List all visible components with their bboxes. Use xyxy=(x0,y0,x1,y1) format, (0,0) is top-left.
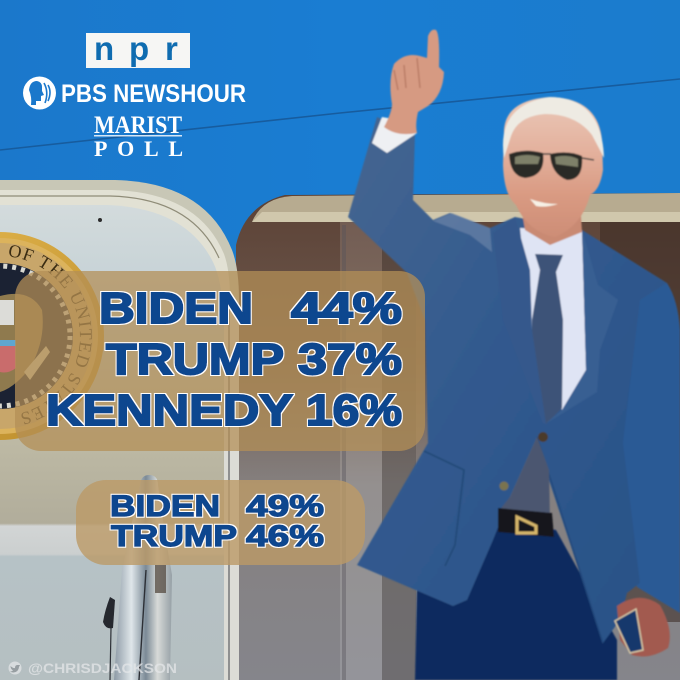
right sleeve xyxy=(620,283,680,613)
jacket front shadow line xyxy=(537,437,603,643)
two-way poll results xyxy=(110,490,324,553)
presidential seal: OF THE UNITED STATES xyxy=(9,245,92,424)
Twitter handle watermark: @CHRISDJACKSON xyxy=(28,661,177,676)
boarding stair rail xyxy=(103,475,172,680)
aircraft door xyxy=(0,180,239,680)
lower tie and belt xyxy=(498,437,550,520)
PBS NewsHour logo xyxy=(23,76,246,110)
raised hand xyxy=(384,30,444,134)
three-way poll results: BIDEN xyxy=(99,284,253,333)
right lapel xyxy=(545,230,618,424)
three-way poll results: TRUMP xyxy=(106,335,284,384)
two-way poll panel xyxy=(76,480,365,565)
jacket buttons xyxy=(500,432,548,490)
two-way poll results: TRUMP xyxy=(111,520,237,553)
two-way poll results: 49% xyxy=(246,490,324,523)
two-way poll results: BIDEN xyxy=(110,490,220,523)
three-way poll results: 37% xyxy=(298,335,402,384)
lower hand and phone xyxy=(615,598,670,656)
blue fuselage background xyxy=(0,0,680,235)
trousers xyxy=(415,520,617,680)
suit jacket xyxy=(348,117,667,643)
hair xyxy=(503,97,604,158)
Marist Poll logo: MARIST xyxy=(94,112,182,139)
aviator sunglasses xyxy=(509,151,594,180)
Marist Poll logo xyxy=(94,112,183,161)
necktie xyxy=(532,254,563,424)
three-way poll panel xyxy=(15,271,425,451)
shirt cuff xyxy=(372,117,417,153)
shirt xyxy=(520,228,586,410)
shoulder highlight xyxy=(433,213,492,252)
NPR logo: npr xyxy=(94,30,178,67)
three-way poll results xyxy=(46,284,402,435)
Marist Poll logo: POLL xyxy=(94,136,183,161)
jacket pocket xyxy=(424,451,464,566)
smile xyxy=(530,199,558,207)
three-way poll results: KENNEDY xyxy=(46,386,293,435)
doorway interior xyxy=(236,193,680,680)
PBS NewsHour logo: PBS NEWSHOUR xyxy=(61,80,246,108)
Biden figure xyxy=(348,30,680,680)
left lapel xyxy=(493,217,546,424)
head xyxy=(503,97,603,237)
neck xyxy=(520,200,582,245)
two-way poll results: 46% xyxy=(246,520,324,553)
three-way poll results: 16% xyxy=(306,386,402,435)
three-way poll results: 44% xyxy=(291,284,402,333)
